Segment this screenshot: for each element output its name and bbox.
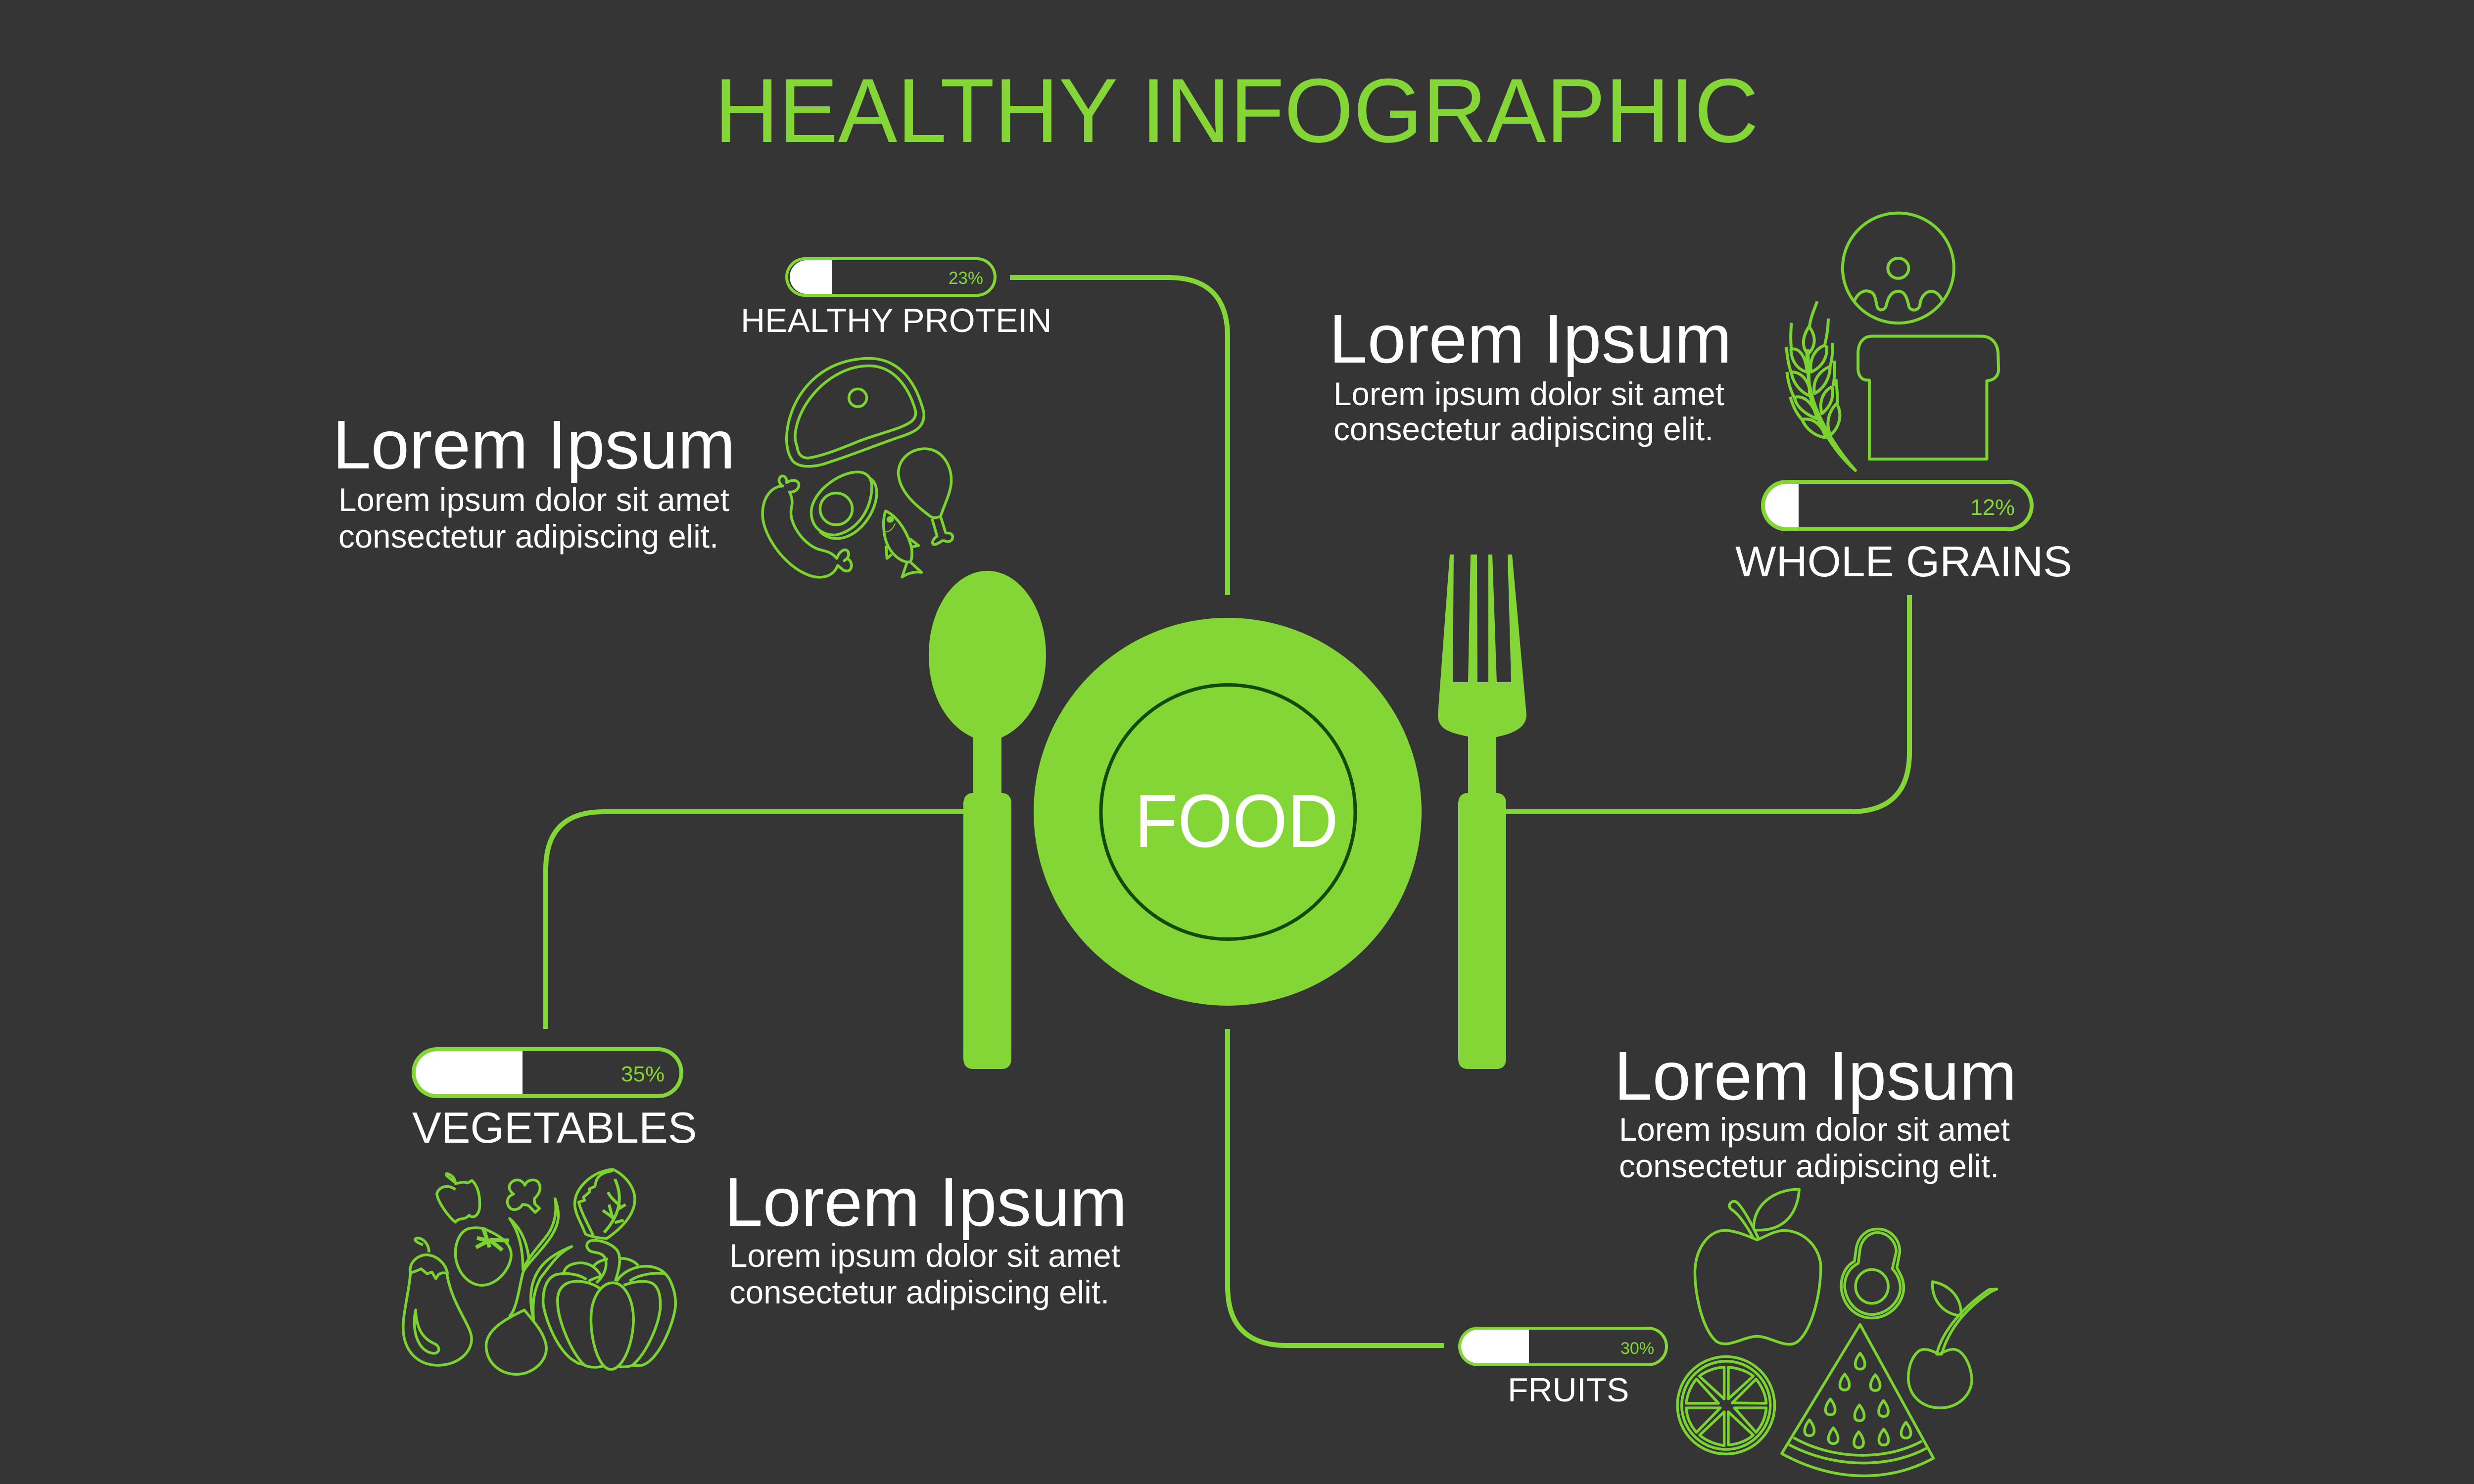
label: healthy protein: HEALTHY PROTEIN [741,302,1052,339]
text block: fruits: consectetur adipiscing elit. [1619,1148,1999,1184]
progress bar 30% [1460,1328,1666,1365]
text block: protein: Lorem Ipsum [333,406,735,483]
text block: vegetables: consectetur adipiscing elit. [729,1274,1109,1310]
panel: healthy protein [333,259,1052,577]
text block: grains: Lorem Ipsum [1329,300,1732,377]
connector: left to vegetables [546,812,963,1029]
panel: fruits [1460,1037,2017,1476]
progress bar 12%: 12% [1970,495,2015,520]
text block: vegetables: Lorem Ipsum [724,1163,1127,1241]
plate label: FOOD [1135,779,1338,863]
label: vegetables: VEGETABLES [412,1103,697,1152]
icon: grains [1787,213,1998,470]
panel: whole grains [1329,213,2072,586]
icon: spoon [929,571,1046,1069]
connector: right to whole grains [1506,595,1909,812]
icon: vegetables [403,1169,675,1374]
plate [1034,618,1422,1006]
text block: protein [333,406,735,555]
text block: fruits [1614,1037,2017,1184]
text block: grains: consectetur adipiscing elit. [1333,411,1713,447]
progress bar 30%: 30% [1620,1339,1654,1358]
connector: top to healthy protein [1010,278,1228,595]
title: HEALTHY INFOGRAPHIC [714,59,1759,161]
label: whole grains: WHOLE GRAINS [1735,537,2072,586]
icon: protein foods [762,358,952,577]
label: fruits: FRUITS [1508,1371,1629,1409]
text block: grains [1329,300,1732,447]
connector: bottom to fruits [1228,1029,1444,1345]
progress bar 12% [1763,482,2032,529]
icon: fork [1438,555,1526,1069]
text block: grains: Lorem ipsum dolor sit amet [1333,376,1724,412]
text block: protein: consectetur adipiscing elit. [338,518,718,555]
progress bar 35%: 35% [621,1062,665,1086]
text block: vegetables [724,1163,1127,1310]
text block: fruits: Lorem Ipsum [1614,1037,2017,1114]
panel: vegetables [403,1049,1127,1374]
progress bar 23%: 23% [949,269,983,288]
progress bar 23% [787,259,995,295]
progress bar 35% [414,1049,681,1096]
icon: fruits [1677,1189,1997,1476]
text block: protein: Lorem ipsum dolor sit amet [338,482,729,518]
text block: vegetables: Lorem ipsum dolor sit amet [729,1238,1120,1274]
text block: fruits: Lorem ipsum dolor sit amet [1619,1112,2010,1148]
